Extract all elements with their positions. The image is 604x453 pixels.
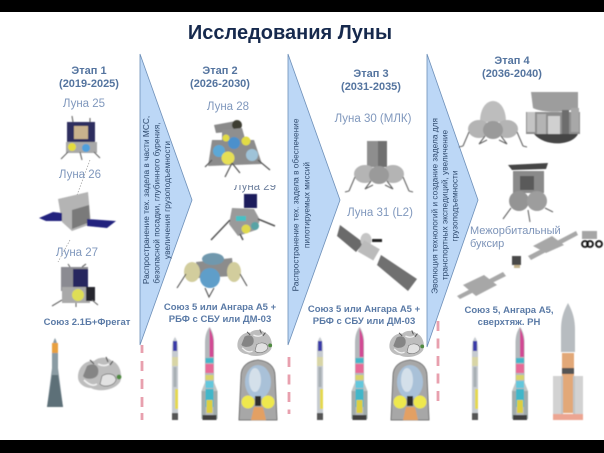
icon: small rocket stage 4 xyxy=(472,337,478,420)
dashed separator 2 xyxy=(288,357,290,414)
heading: stage 3: Этап 3 xyxy=(353,68,389,80)
icon: Soyuz rocket xyxy=(47,338,63,407)
dashed separator 3 xyxy=(437,321,439,402)
icon: Luna 25 lander xyxy=(61,116,100,160)
title: Исследования Луны xyxy=(188,22,392,44)
arrow 3: stage 3 to stage 4 xyxy=(427,54,478,347)
label: interorbital tug: Межорбитальный xyxy=(470,225,561,237)
label: Luna 29 (clipped): Луна 29 xyxy=(234,181,276,193)
icon: super-heavy rocket xyxy=(553,303,583,420)
heading: stage 4: Этап 4 xyxy=(494,55,530,67)
label: stage 2 launchers: РБФ с СБУ или ДМ-03 xyxy=(169,314,271,325)
arrow 1: stage 1 to stage 2 xyxy=(140,54,192,345)
icon: fairing cutaway stage 3 xyxy=(391,360,429,420)
arrow 3: stage 3 to stage 4: Эволюция технологий и создание задела для xyxy=(430,118,440,294)
arrow 1: stage 1 to stage 2: увеличения грузоподъемности xyxy=(162,141,172,259)
arrow 2: stage 2 to stage 3 xyxy=(288,54,340,345)
icon: medium rocket stage 2 xyxy=(202,327,218,420)
icon: Luna 27 lander xyxy=(52,264,98,307)
heading: stage 1: (2019-2025) xyxy=(59,78,119,90)
icon: Fregat upper stage xyxy=(78,357,121,390)
label: stage 4 launchers: Союз 5, Ангара А5, xyxy=(464,305,554,316)
icon: Luna lander with tanks xyxy=(177,253,247,297)
label: Luna 30: Луна 30 (МЛК) xyxy=(335,113,412,125)
heading: stage 1: Этап 1 xyxy=(71,65,107,77)
icon: interorbital tug xyxy=(457,231,578,299)
icon: Luna 29 lander with rover xyxy=(211,194,275,240)
icon: Luna 26 orbiter xyxy=(39,192,116,231)
label: stage 1 launcher: Союз 2.1Б+Фрегат xyxy=(44,317,131,328)
label: stage 3 launchers: РБФ с СБУ или ДМ-03 xyxy=(313,316,415,327)
icon: small rocket stage 3 xyxy=(317,337,323,420)
arrow 3: stage 3 to stage 4: транспортных экспедиций, увеличение xyxy=(440,129,450,280)
icon: cargo lander xyxy=(503,163,553,222)
label: Luna 31: Луна 31 (L2) xyxy=(347,207,413,219)
top black band xyxy=(0,0,604,12)
arrow 1: stage 1 to stage 2: Распространение тех. задела в части МСС, xyxy=(141,116,151,284)
icon: Luna 28 lander xyxy=(205,120,270,177)
bottom black band xyxy=(0,440,604,453)
label: stage 3 launchers: Союз 5 или Ангара А5 + xyxy=(308,304,420,315)
icon: medium rocket stage 3 xyxy=(352,327,368,420)
icon: crewed lander xyxy=(459,101,527,147)
icon: upper stage blob stage 3 xyxy=(389,330,424,357)
label: Luna 25: Луна 25 xyxy=(63,98,105,110)
label: interorbital tug: буксир xyxy=(470,238,504,250)
heading: stage 3: (2031-2035) xyxy=(341,81,401,93)
icon: Luna 30 lander xyxy=(345,141,413,192)
dashed separator 1 xyxy=(141,345,143,420)
icon: lunar rover xyxy=(582,231,602,247)
arrow 2: stage 2 to stage 3: Распространение тех. задела в обеспечение xyxy=(290,118,300,291)
label: stage 4 launchers: сверхтяж. РН xyxy=(478,317,540,328)
icon: upper stage blob stage 2 xyxy=(237,329,272,356)
label: stage 2 launchers: Союз 5 или Ангара А5 + xyxy=(164,302,276,313)
dotted trajectory line xyxy=(58,160,90,262)
label: Luna 28: Луна 28 xyxy=(207,101,249,113)
arrow 1: stage 1 to stage 2: безопасной посадки, глубинного бурения, xyxy=(152,122,162,284)
arrow 3: stage 3 to stage 4: грузоподъемности xyxy=(450,170,460,241)
label: Luna 26: Луна 26 xyxy=(59,169,101,181)
icon: fairing cutaway stage 2 xyxy=(239,360,277,420)
heading: stage 2: Этап 2 xyxy=(202,65,238,77)
icon: Luna 31 orbiter xyxy=(337,225,417,291)
label: Luna 27: Луна 27 xyxy=(56,247,98,259)
heading: stage 2: (2026-2030) xyxy=(190,78,250,90)
icon: medium rocket stage 4 xyxy=(512,327,528,420)
arrow 2: stage 2 to stage 3: пилотируемых миссий xyxy=(302,162,312,248)
heading: stage 4: (2036-2040) xyxy=(482,68,542,80)
icon: small rocket stage 2 xyxy=(172,337,178,420)
icon: heavy lander with tanks xyxy=(526,92,580,143)
